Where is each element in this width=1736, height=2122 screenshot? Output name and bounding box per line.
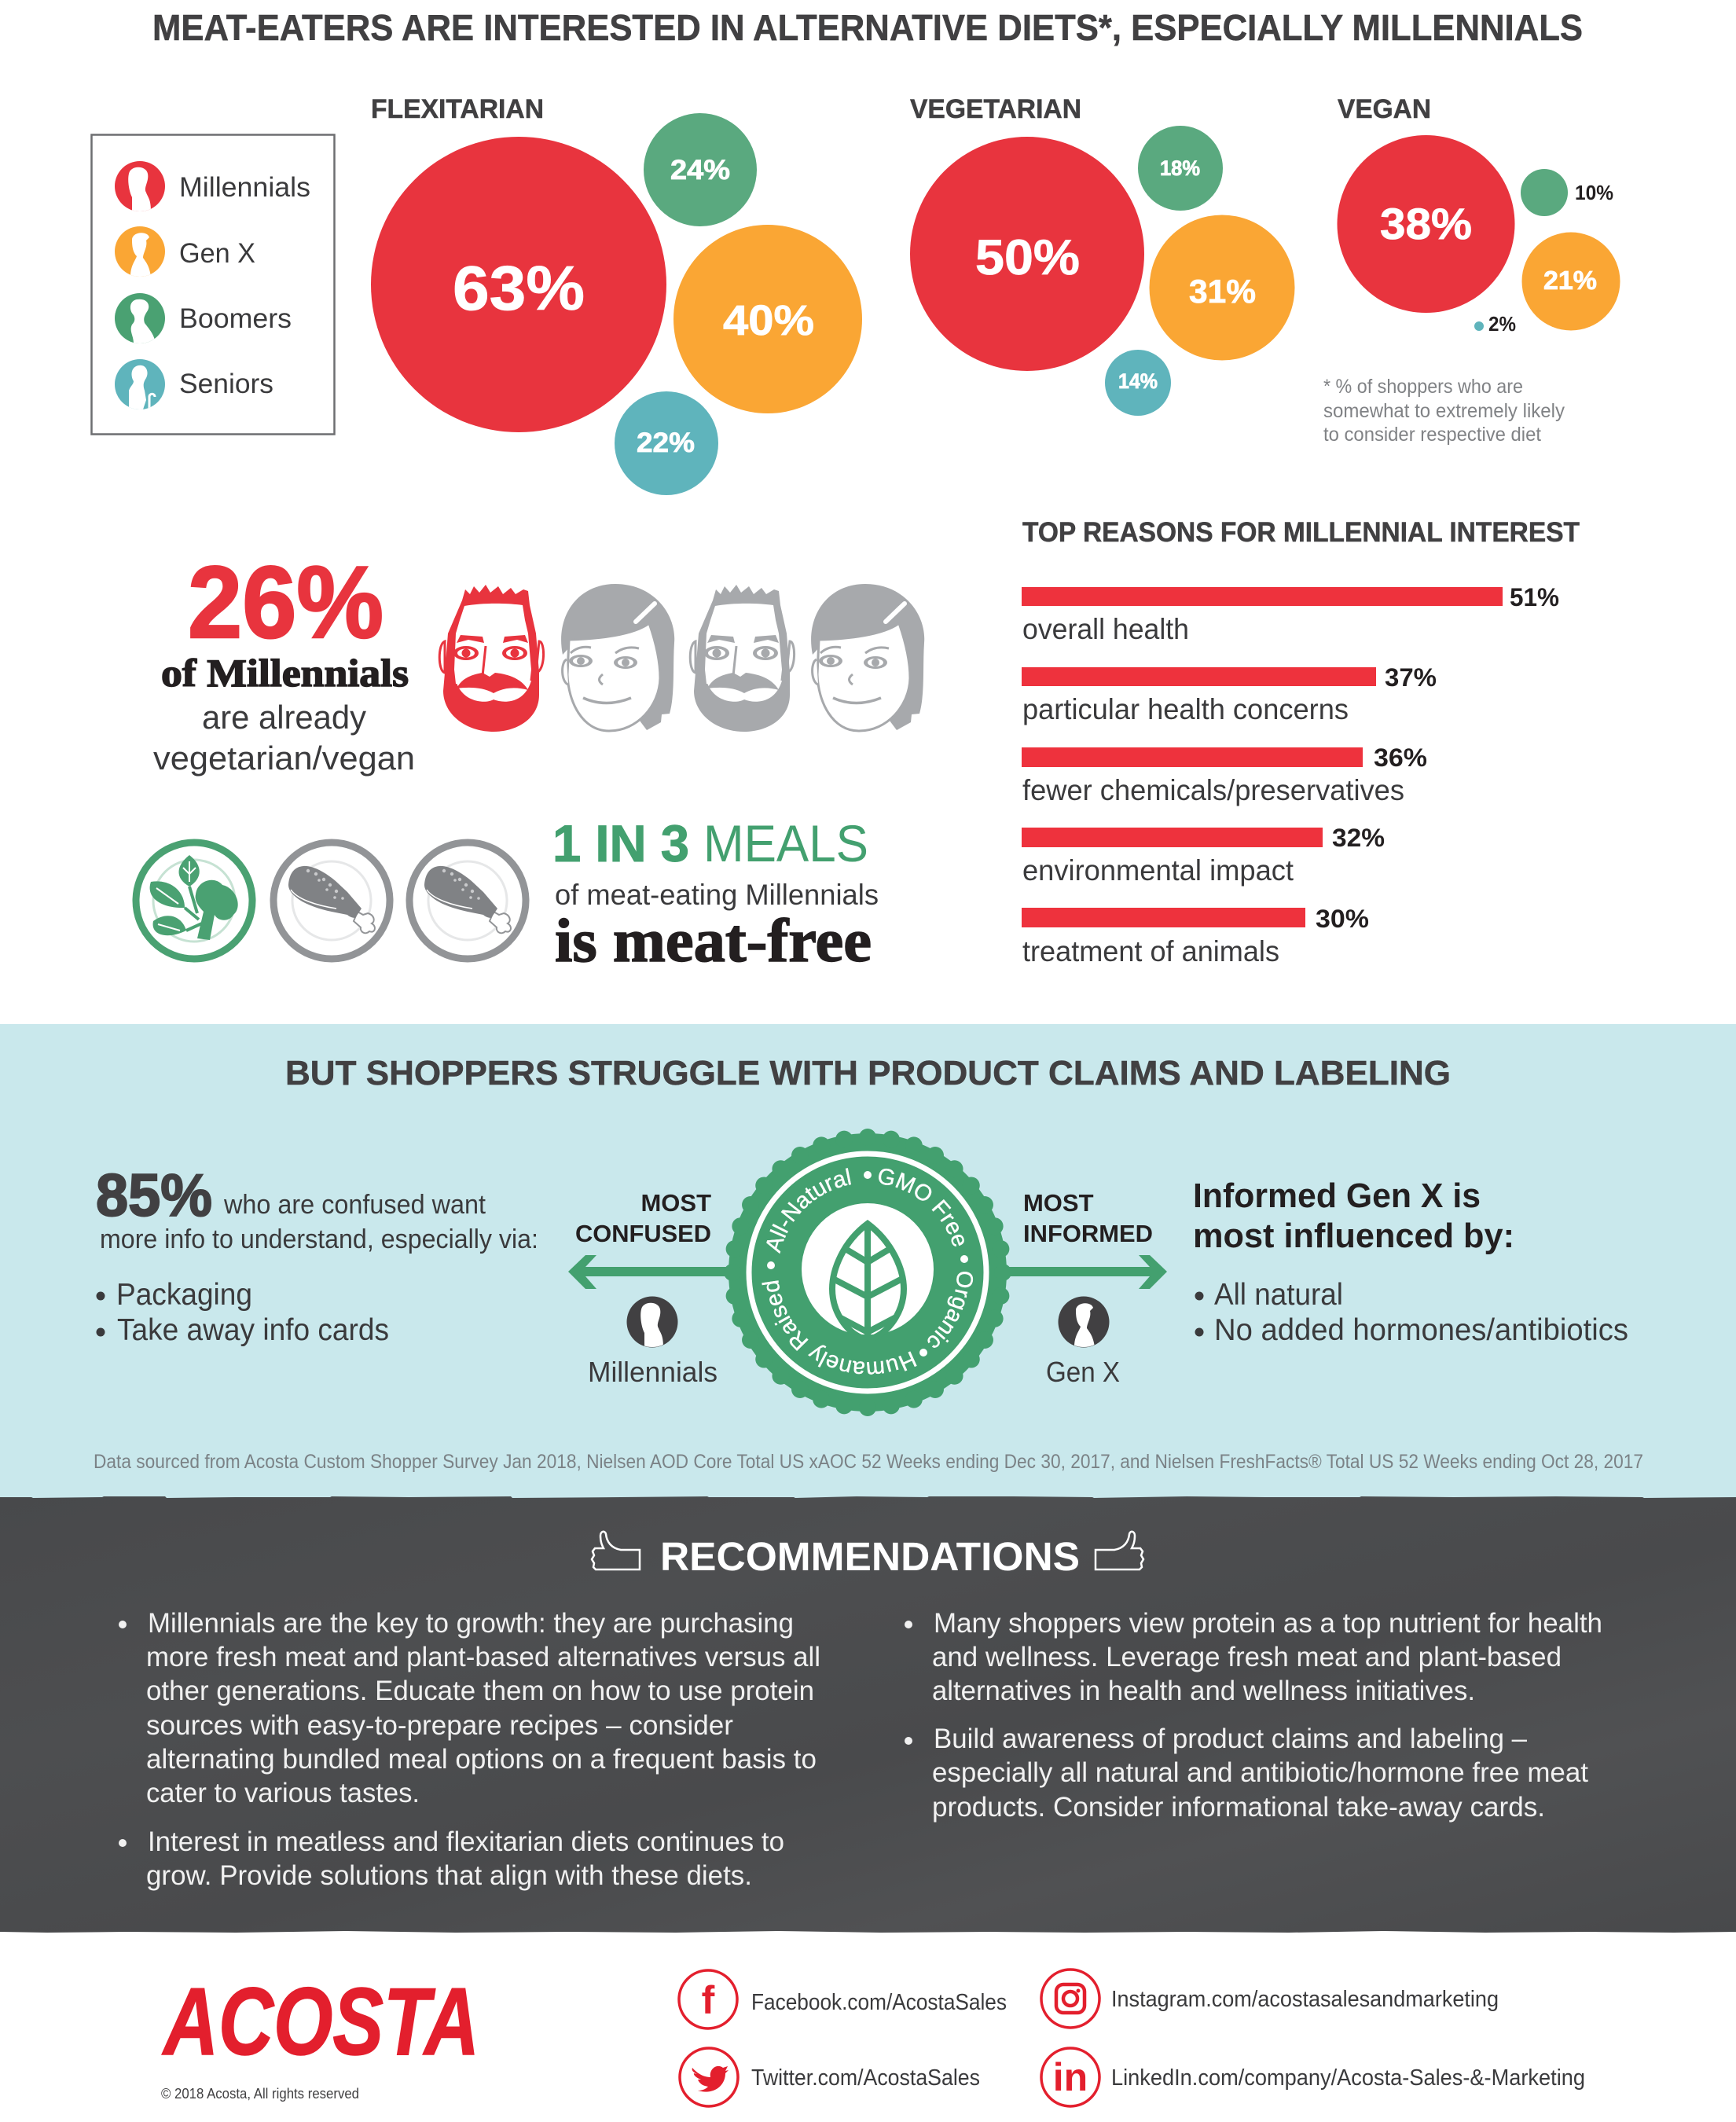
- text block: informed gen x: [1193, 1177, 1628, 1347]
- bar chart: top reasons: [1022, 517, 1580, 967]
- text block: left recommendations: other generations. Educate them on how to use protein: [146, 1676, 814, 1706]
- icon: gen x silhouette: [1058, 1297, 1110, 1347]
- text block: right recommendations: Many shoppers view protein as a top nutrient for health: [934, 1608, 1602, 1639]
- bubble: millennials 50%: 50%: [975, 230, 1080, 285]
- stat: 1 in 3 meals: 1 IN 3: [552, 814, 689, 872]
- stat: 26% of millennials: vegetarian/vegan: [153, 740, 415, 776]
- badge: claims seal: GMO Free: [879, 1168, 964, 1246]
- legend item: Boomers: Boomers: [179, 303, 292, 334]
- text block: 85% confused: Take away info cards: [117, 1313, 389, 1347]
- text block: left recommendations: grow. Provide solutions that align with these diets.: [146, 1860, 752, 1891]
- heading: VEGAN: [1338, 94, 1431, 124]
- legend item: Gen X: Gen X: [179, 238, 255, 269]
- bubble: boomers 18%: 18%: [1160, 156, 1200, 180]
- bar: environmental impact: environmental impact: [1022, 854, 1294, 887]
- bubble: gen x 21%: [1521, 233, 1620, 330]
- logo: Acosta: ACOSTA: [162, 1968, 479, 2075]
- social: instagram: [1041, 1970, 1499, 2028]
- legend item: Seniors: [115, 359, 273, 409]
- text block: 85% confused: 85%: [96, 1162, 212, 1229]
- bubble chart: vegan: [1338, 94, 1620, 336]
- footnote: to consider respective diet: [1323, 424, 1541, 446]
- bubble: boomers 10%: 10%: [1575, 181, 1613, 204]
- social: facebook: f: [702, 1978, 715, 2022]
- social: linkedin: in: [1053, 2055, 1088, 2099]
- heading: BUT SHOPPERS STRUGGLE WITH PRODUCT CLAIMS AND LABELING: [285, 1054, 1451, 1092]
- bubble: boomers 18%: [1138, 126, 1223, 211]
- icon: chicken plate: [273, 843, 390, 959]
- legend item: Millennials: Millennials: [179, 172, 310, 203]
- bubble: seniors 14%: 14%: [1118, 369, 1158, 393]
- footnote: * % of shoppers who are: [1323, 376, 1523, 398]
- bar: fewer chemicals/preservatives: fewer chemicals/preservatives: [1022, 774, 1404, 806]
- stat: 26% of millennials: [153, 545, 415, 776]
- heading: RECOMMENDATIONS: [660, 1534, 1080, 1579]
- bubble: millennials 50%: [910, 137, 1144, 371]
- panel: recommendations: [0, 1496, 1736, 1933]
- text block: informed gen x: All natural: [1214, 1278, 1343, 1312]
- label: gen x: Gen X: [1046, 1356, 1120, 1388]
- bubble: gen x 40%: 40%: [723, 297, 814, 344]
- bar: overall health: [1022, 583, 1559, 645]
- bubble: boomers 24%: 24%: [670, 155, 730, 185]
- icon: red bearded man: [439, 585, 544, 732]
- badge: claims seal: Humanely Raised: [762, 1280, 917, 1375]
- text block: left recommendations: Millennials are the key to growth: they are purchasing: [148, 1608, 794, 1639]
- bar: particular health concerns: particular health concerns: [1022, 693, 1349, 725]
- text block: 85% confused: more info to understand, especially via:: [100, 1224, 538, 1254]
- label: most informed: [1023, 1189, 1153, 1247]
- text block: left recommendations: Interest in meatless and flexitarian diets continues to: [148, 1826, 784, 1857]
- bubble: millennials 63%: [371, 137, 666, 432]
- bubble: seniors 2%: 2%: [1488, 312, 1516, 336]
- legend item: Millennials: [115, 161, 310, 211]
- bar: fewer chemicals/preservatives: [1022, 743, 1427, 806]
- stat: 1 in 3 meals: MEALS: [703, 814, 868, 872]
- social: instagram: Instagram.com/acostasalesandmarketing: [1111, 1987, 1499, 2012]
- bubble: seniors 2%: [1474, 312, 1516, 336]
- text block: 85% confused: [96, 1162, 538, 1347]
- icon: green vegetable plate: [136, 843, 252, 959]
- icon: gray bearded man: [690, 585, 795, 732]
- stat: 1 in 3 meals: [552, 814, 879, 975]
- text block: left recommendations: more fresh meat and plant-based alternatives versus all: [146, 1642, 820, 1672]
- heading: TOP REASONS FOR MILLENNIAL INTEREST: [1022, 517, 1580, 548]
- social: facebook: Facebook.com/AcostaSales: [751, 1990, 1007, 2015]
- text block: right recommendations: alternatives in health and wellness initiatives.: [932, 1676, 1475, 1706]
- stat: 1 in 3 meals: is meat-free: [555, 906, 872, 975]
- badge: claims seal: [725, 1129, 1011, 1416]
- social: linkedin: LinkedIn.com/company/Acosta-Sales-&-Marketing: [1111, 2065, 1585, 2091]
- legend item: Seniors: Seniors: [179, 369, 273, 399]
- copyright: © 2018 Acosta, All rights reserved: [161, 2086, 359, 2102]
- text block: right recommendations: products. Consider informational take-away cards.: [932, 1792, 1545, 1823]
- arrow: most informed: [1004, 1255, 1167, 1289]
- stat: 1 in 3 meals: of meat-eating Millennials: [555, 879, 879, 911]
- bubble: gen x 31%: 31%: [1189, 273, 1256, 310]
- bar: treatment of animals: [1022, 905, 1369, 967]
- bar: fewer chemicals/preservatives: 36%: [1374, 743, 1427, 772]
- label: most confused: [575, 1189, 711, 1247]
- badge: claims seal: All-Natural: [766, 1168, 851, 1254]
- bar: environmental impact: 32%: [1332, 824, 1385, 852]
- text block: left recommendations: [119, 1608, 820, 1891]
- social: twitter: Twitter.com/AcostaSales: [751, 2065, 980, 2091]
- bubble: millennials 38%: 38%: [1380, 199, 1472, 248]
- stat: 26% of millennials: 26%: [188, 545, 384, 659]
- label: most confused: CONFUSED: [575, 1220, 711, 1247]
- icon: thumbs up left: [592, 1532, 640, 1569]
- text block: left recommendations: alternating bundled meal options on a frequent basis to: [146, 1744, 817, 1775]
- bubble chart: flexitarian: [371, 94, 862, 495]
- icon: thumbs up right: [1096, 1532, 1143, 1569]
- icon: gray woman: [561, 584, 674, 731]
- text block: left recommendations: cater to various tastes.: [146, 1778, 420, 1808]
- label: most informed: MOST: [1023, 1189, 1094, 1217]
- text block: 85% confused: Packaging: [116, 1278, 252, 1312]
- bar: treatment of animals: treatment of animals: [1022, 935, 1279, 967]
- label: most informed: INFORMED: [1023, 1220, 1153, 1247]
- stat: 26% of millennials: are already: [202, 699, 366, 736]
- bubble: gen x 40%: [673, 225, 862, 413]
- title: MEAT-EATERS ARE INTERESTED IN ALTERNATIVE DIETS*, ESPECIALLY MILLENNIALS: [152, 7, 1583, 48]
- text block: right recommendations: and wellness. Leverage fresh meat and plant-based: [932, 1642, 1562, 1672]
- bubble: seniors 22%: 22%: [637, 428, 695, 458]
- bar: overall health: overall health: [1022, 613, 1189, 645]
- text block: right recommendations: Build awareness of product claims and labeling –: [934, 1724, 1528, 1754]
- bubble: seniors 14%: [1105, 350, 1171, 416]
- icon: gray woman: [811, 584, 924, 731]
- arrow: most confused: [568, 1255, 731, 1289]
- text block: left recommendations: sources with easy-to-prepare recipes – consider: [146, 1710, 733, 1741]
- legend item: Boomers: [115, 293, 292, 343]
- footnote: [1323, 376, 1565, 446]
- bar: treatment of animals: 30%: [1316, 905, 1369, 933]
- bubble chart: vegetarian: [910, 94, 1295, 416]
- bubble: millennials 63%: 63%: [453, 253, 585, 323]
- bar: environmental impact: [1022, 824, 1385, 887]
- heading: FLEXITARIAN: [371, 94, 544, 124]
- text block: informed gen x: No added hormones/antibiotics: [1214, 1313, 1628, 1347]
- heading: VEGETARIAN: [910, 94, 1081, 124]
- footnote: somewhat to extremely likely: [1323, 400, 1565, 422]
- legend item: Gen X: [115, 226, 255, 277]
- bubble: gen x 21%: 21%: [1543, 266, 1597, 295]
- text block: informed gen x: most influenced by:: [1193, 1217, 1514, 1255]
- bubble: boomers 24%: [644, 113, 757, 226]
- text block: 85% confused: who are confused want: [223, 1190, 486, 1220]
- icon: chicken plate: [409, 843, 526, 959]
- bar: particular health concerns: 37%: [1385, 663, 1437, 692]
- text block: right recommendations: especially all natural and antibiotic/hormone free meat: [932, 1757, 1588, 1788]
- bubble: gen x 31%: [1149, 215, 1295, 360]
- text block: right recommendations: [905, 1608, 1602, 1823]
- badge: claims seal: Organic: [927, 1272, 973, 1348]
- bubble: seniors 22%: [615, 391, 718, 495]
- label: millennials: Millennials: [588, 1356, 718, 1388]
- text block: informed gen x: Informed Gen X is: [1193, 1177, 1481, 1215]
- panel: legend: [91, 135, 335, 434]
- panel: product claims and labeling: [0, 1024, 1736, 1498]
- social: twitter: [680, 2048, 980, 2106]
- social: linkedin: [1041, 2048, 1585, 2106]
- bar: particular health concerns: [1022, 663, 1437, 725]
- icon: millennials silhouette: [627, 1297, 677, 1347]
- bubble: boomers 10%: [1521, 169, 1613, 216]
- stat: 26% of millennials: of Millennials: [161, 651, 409, 695]
- label: most confused: MOST: [641, 1189, 711, 1217]
- social: facebook: [679, 1970, 1007, 2028]
- bar: overall health: 51%: [1510, 583, 1559, 611]
- bubble: millennials 38%: [1338, 135, 1515, 313]
